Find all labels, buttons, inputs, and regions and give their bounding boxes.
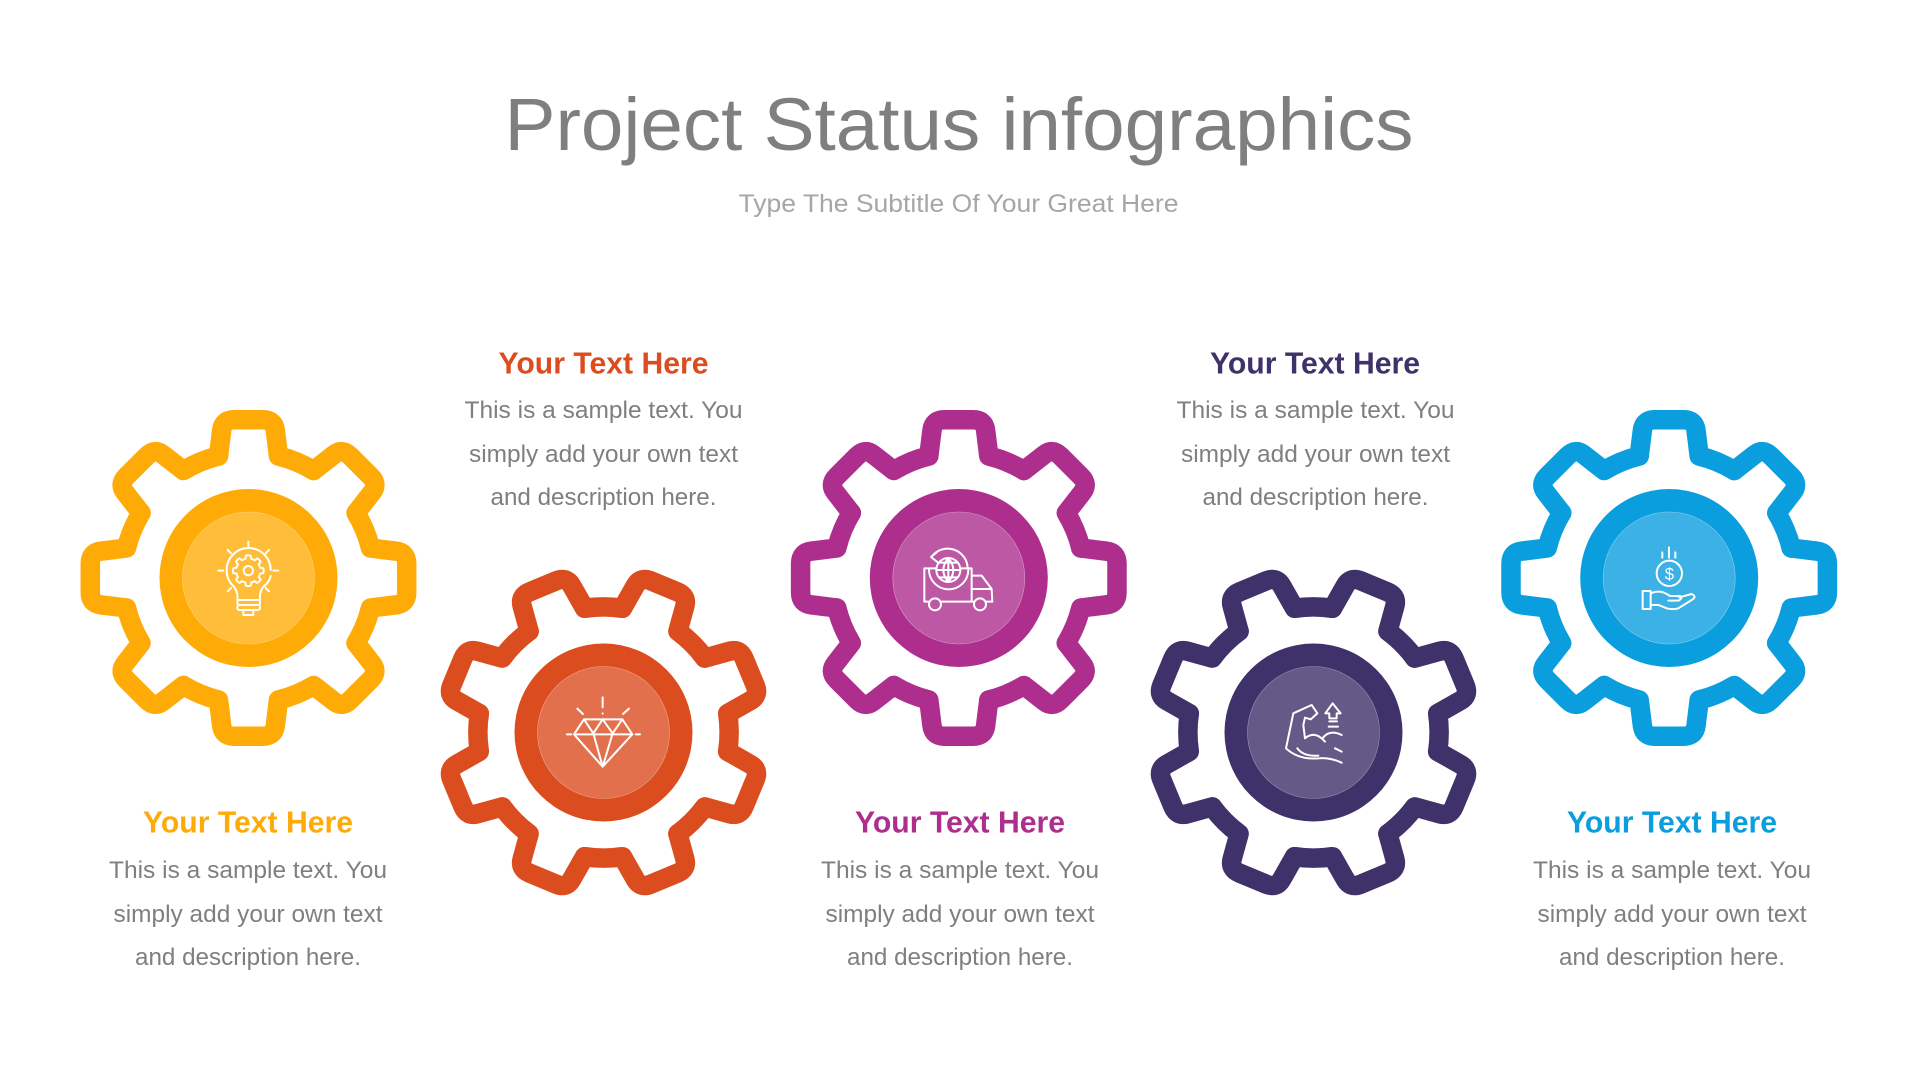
- heading: step 4: Your Text Here: [1210, 346, 1420, 380]
- text block: step 4: [1176, 397, 1454, 511]
- hub: magenta: [870, 489, 1048, 667]
- text block: step 5: and description here.: [1559, 944, 1785, 971]
- title: Project Status infographics: [504, 83, 1414, 166]
- icon: diamond: [567, 697, 640, 767]
- gear outline: orange: [90, 420, 407, 736]
- text block: step 4: and description here.: [1202, 484, 1428, 511]
- subtitle: Type The Subtitle Of Your Great Here: [738, 190, 1178, 218]
- icon: hand receiving coin: $: [1665, 564, 1674, 583]
- text block: step 1: and description here.: [135, 944, 361, 971]
- panel: step 1 orange gear: [90, 420, 407, 971]
- text block: step 3: simply add your own text: [826, 901, 1095, 928]
- heading: step 3: Your Text Here: [855, 806, 1065, 840]
- text block: step 3: and description here.: [847, 944, 1073, 971]
- text block: step 2: [464, 397, 742, 511]
- hub: red: [514, 644, 692, 822]
- heading: step 5: Your Text Here: [1567, 806, 1777, 840]
- text block: step 2: and description here.: [490, 484, 716, 511]
- text block: step 5: [1533, 857, 1811, 971]
- text block: step 5: This is a sample text. You: [1533, 857, 1811, 884]
- gear outline: navy: [1107, 526, 1520, 939]
- text block: step 2: simply add your own text: [469, 441, 738, 468]
- panel: step 2 red gear: [397, 346, 810, 939]
- text block: step 5: simply add your own text: [1538, 901, 1807, 928]
- text block: step 4: simply add your own text: [1181, 441, 1450, 468]
- gear outline: blue: [1511, 420, 1827, 736]
- panel: step 4 navy gear: [1107, 346, 1520, 939]
- hub: orange: [160, 489, 338, 667]
- gear outline: magenta: [801, 420, 1117, 736]
- heading: step 2: Your Text Here: [498, 346, 708, 380]
- panel: step 5 blue gear: [1511, 420, 1827, 971]
- panel: step 3 magenta gear: [801, 420, 1117, 971]
- hub: blue: [1580, 489, 1758, 667]
- gear outline: red: [397, 526, 810, 939]
- text block: step 1: This is a sample text. You: [109, 857, 387, 884]
- text block: step 3: [821, 857, 1099, 971]
- icon: flexed arm with up arrow: [1286, 703, 1342, 763]
- text block: step 2: This is a sample text. You: [464, 397, 742, 424]
- text block: step 1: simply add your own text: [114, 901, 383, 928]
- text block: step 1: [109, 857, 387, 971]
- icon: hand receiving coin: [1643, 547, 1694, 609]
- text block: step 4: This is a sample text. You: [1176, 397, 1454, 424]
- icon: delivery truck with globe: [924, 549, 992, 610]
- heading: step 1: Your Text Here: [143, 806, 353, 840]
- text block: step 3: This is a sample text. You: [821, 857, 1099, 884]
- icon: light bulb with cog: [218, 542, 278, 615]
- hub: navy: [1224, 644, 1402, 822]
